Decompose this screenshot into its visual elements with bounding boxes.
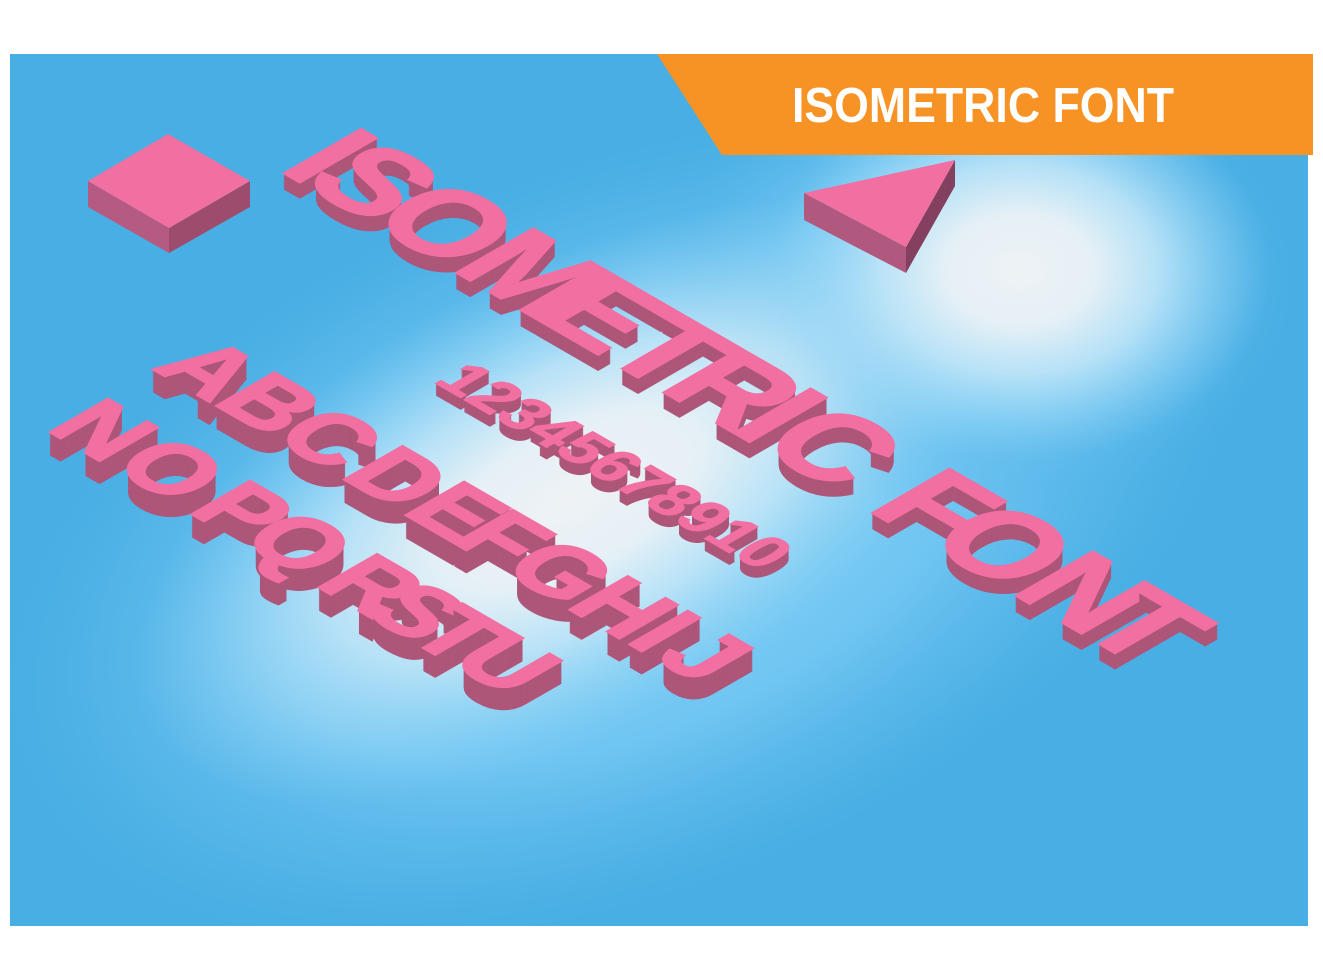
icon: isometric pink triangle block (804, 160, 955, 273)
icon: isometric pink square block (88, 134, 250, 253)
isometric alphabet row N to U: NOPQRSTU (26, 384, 582, 706)
orange banner with title (657, 54, 1313, 155)
isometric alphabet row A to J: ABCDEFGHIJ (132, 324, 776, 695)
orange banner with title: ISOMETRIC FONT (792, 79, 1174, 133)
large isometric heading: ISOMETRIC FONT (252, 110, 1235, 678)
isometric numbers row: 12345678910 (420, 354, 808, 578)
